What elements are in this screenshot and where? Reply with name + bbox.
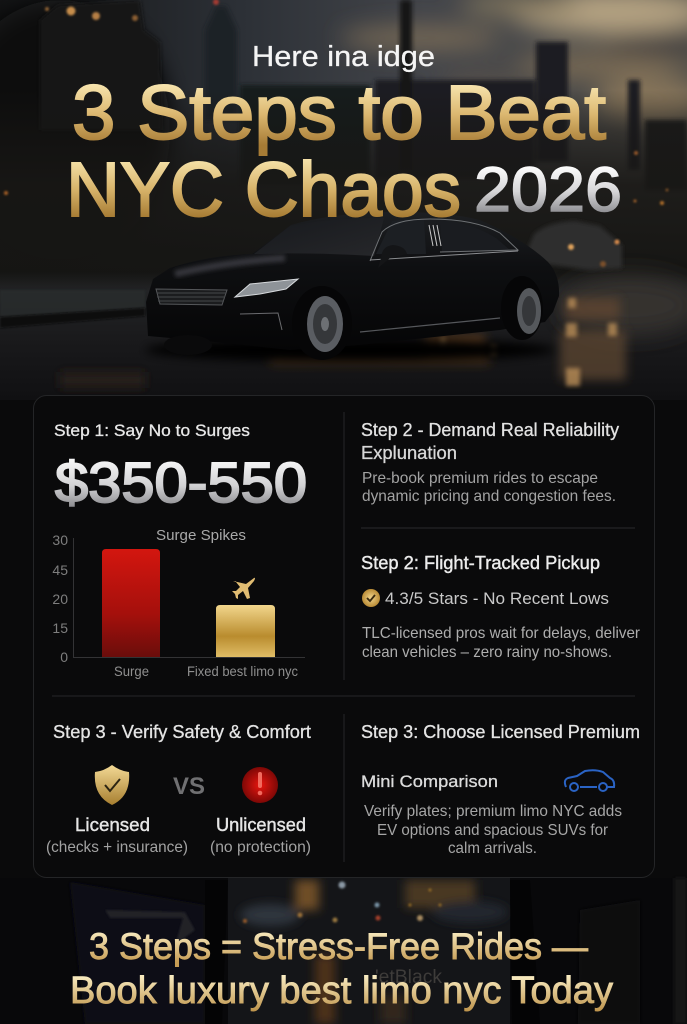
x labels: Fixed best limo nyc — [187, 664, 298, 679]
title line 1: 3 Steps to Beat — [72, 70, 606, 156]
y axis: 0 — [60, 649, 68, 665]
step 2 flight-tracked block: Step 2: Flight-Tracked Pickup — [361, 553, 600, 573]
black limousine — [145, 212, 559, 362]
vs label: VS — [173, 773, 205, 800]
licensed label — [46, 815, 188, 856]
step 3 licensed premium block: Mini Comparison — [361, 772, 498, 791]
car grille — [156, 289, 227, 305]
x labels — [114, 664, 298, 679]
icon: airplane — [232, 578, 255, 599]
step 3 licensed premium block: Step 3: Choose Licensed Premium — [361, 722, 640, 742]
y axis: 30 — [52, 532, 68, 548]
bottom car interior background — [0, 878, 687, 1024]
icon: blue car — [565, 770, 614, 791]
y axis: 20 — [52, 591, 68, 607]
step 2 reliability block — [361, 420, 619, 505]
title line 2: NYC Chaos — [66, 147, 461, 233]
unlicensed label: Unlicensed — [216, 815, 306, 835]
step 3 safety comparison — [46, 722, 311, 856]
x labels: Surge — [114, 664, 149, 679]
licensed label: Licensed — [75, 815, 150, 835]
call to action: Book luxury best limo nyc Today — [70, 970, 613, 1012]
main dark panel — [34, 396, 654, 878]
subtitle: Here ina idge — [252, 41, 435, 73]
step 2 flight-tracked block: clean vehicles – zero rainy no-shows. — [362, 644, 612, 661]
bar: surge — [102, 549, 160, 657]
title line 2: 2026 — [474, 155, 622, 225]
step 3 safety comparison: Step 3 - Verify Safety & Comfort — [53, 722, 311, 742]
step 2 reliability block: Pre-book premium rides to escape — [362, 470, 598, 487]
step 2 reliability block: Explunation — [361, 443, 457, 463]
wet road — [0, 272, 687, 400]
icon: gold shield — [95, 765, 129, 805]
car mirror — [378, 245, 407, 268]
icon: red warning — [242, 767, 278, 803]
background car with headlights — [525, 221, 622, 270]
y axis — [52, 532, 68, 665]
unlicensed label: (no protection) — [210, 839, 311, 856]
car body — [146, 212, 559, 350]
icon: gold check badge — [362, 589, 380, 607]
y axis: 15 — [52, 620, 68, 636]
faint watermark: 'etBlack — [375, 967, 443, 988]
price range: $350-550 — [55, 451, 307, 515]
step 2 reliability block: Step 2 - Demand Real Reliability — [361, 420, 619, 440]
city skyline background at dusk — [0, 0, 687, 280]
step 2 reliability block: dynamic pricing and congestion fees. — [362, 488, 616, 505]
step 3 licensed premium block — [361, 722, 640, 857]
step 3 licensed premium block: calm arrivals. — [448, 840, 537, 857]
y axis: 45 — [52, 562, 68, 578]
step 3 licensed premium block: EV options and spacious SUVs for — [377, 822, 609, 839]
bar chart: surge spikes — [52, 527, 305, 679]
car headlight — [235, 279, 298, 297]
call to action — [70, 926, 613, 1012]
rating: 4.3/5 Stars - No Recent Lows — [385, 589, 609, 608]
bar: fixed — [216, 605, 275, 657]
call to action: 3 Steps = Stress-Free Rides — — [89, 926, 588, 967]
car windows — [254, 218, 384, 256]
step 3 licensed premium block: Verify plates; premium limo NYC adds — [364, 803, 622, 820]
step 2 flight-tracked block — [361, 553, 641, 661]
step 2 flight-tracked block: TLC-licensed pros wait for delays, deliver — [362, 625, 641, 642]
chart title: Surge Spikes — [156, 527, 246, 544]
unlicensed label — [210, 815, 311, 856]
step 1 heading: Step 1: Say No to Surges — [54, 421, 250, 440]
car front wheel — [292, 286, 352, 360]
licensed label: (checks + insurance) — [46, 839, 188, 856]
car rear wheel — [501, 276, 543, 340]
